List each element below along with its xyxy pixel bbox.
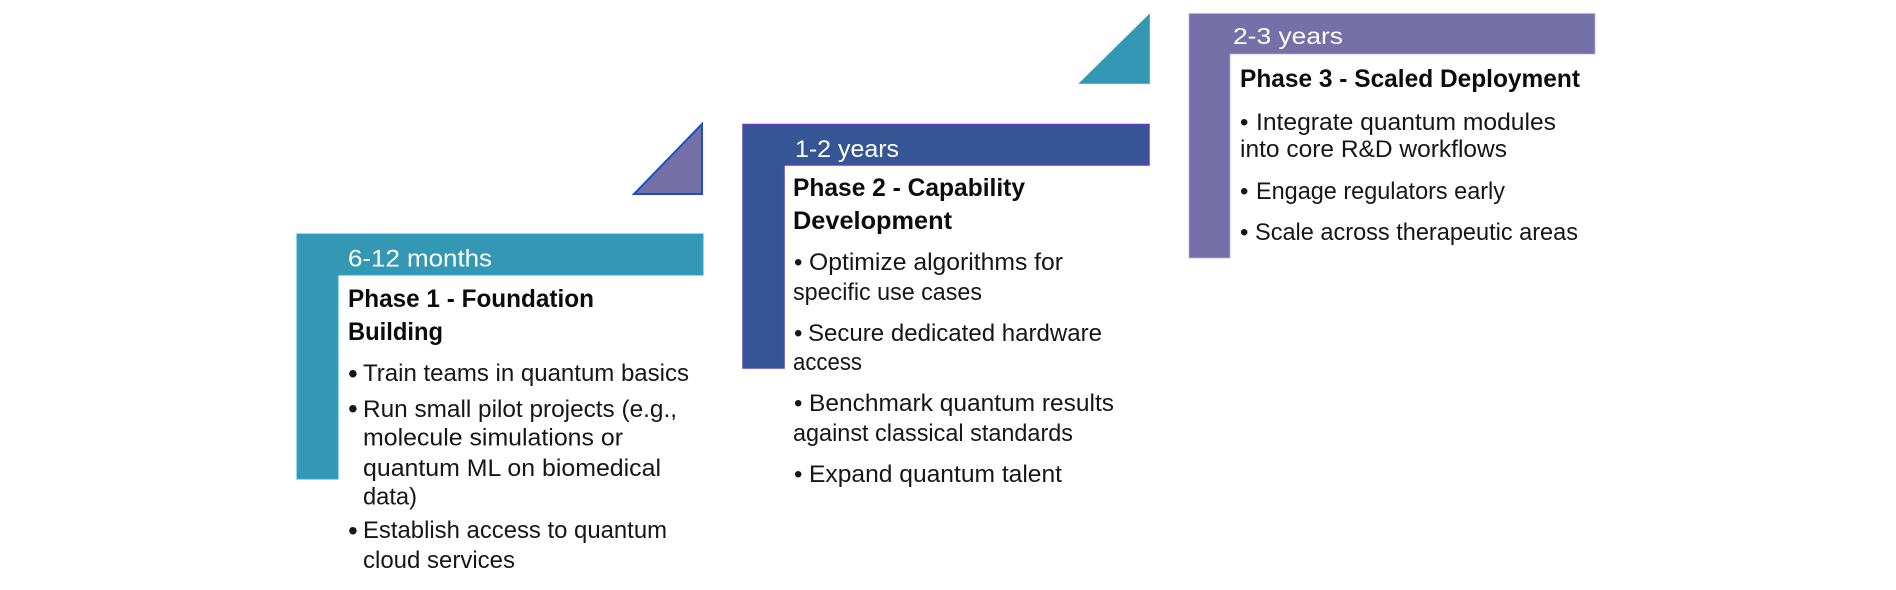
bullet list: phase 2: access	[793, 349, 862, 376]
bullet list: phase 2	[793, 249, 1114, 488]
panel: phase 3	[1189, 14, 1595, 258]
duration: 1-2 years: 1-2 years	[795, 136, 899, 163]
heading: phase 1: Phase 1 - Foundation	[348, 285, 594, 313]
heading: phase 1	[348, 285, 594, 346]
bullet list: phase 2: •	[794, 390, 802, 417]
bullet list: phase 2: specific use cases	[793, 279, 982, 306]
heading: phase 2: Phase 2 - Capability	[793, 174, 1025, 202]
bullet list: phase 1: Establish access to quantum	[363, 517, 667, 544]
bullet list: phase 3: into core R&D workflows	[1240, 136, 1507, 163]
bullet list: phase 3: Integrate quantum modules	[1256, 109, 1556, 136]
bullet list: phase 3	[1240, 109, 1578, 246]
bullet list: phase 1: quantum ML on biomedical	[363, 455, 661, 482]
bullet list: phase 2: Secure dedicated hardware	[808, 320, 1102, 347]
bullet list: phase 1: cloud services	[363, 547, 515, 574]
bullet list: phase 3: Engage regulators early	[1256, 178, 1505, 205]
bullet list: phase 1: Run small pilot projects (e.g.,	[363, 396, 677, 423]
bullet list: phase 2: Expand quantum talent	[809, 461, 1062, 488]
duration: 2-3 years: 2-3 years	[1233, 23, 1343, 49]
duration: 6-12 months: 6-12 months	[348, 246, 492, 272]
bullet list: phase 2: •	[794, 461, 802, 488]
heading: phase 3: Phase 3 - Scaled Deployment	[1240, 65, 1581, 93]
heading: phase 2: Development	[793, 207, 953, 235]
bullet list: phase 1: data)	[363, 484, 417, 510]
bullet list: phase 2: •	[794, 249, 802, 276]
bullet list: phase 2: •	[794, 320, 802, 347]
bullet list: phase 1	[348, 358, 689, 574]
bullet list: phase 2: Benchmark quantum results	[809, 390, 1114, 417]
heading: phase 1: Building	[348, 318, 443, 346]
bullet list: phase 1: •	[348, 515, 358, 546]
bullet list: phase 3: •	[1240, 178, 1248, 205]
panel: phase 2	[743, 124, 1149, 488]
L-shaped banner: phase 3	[1189, 14, 1595, 258]
panel: phase 1	[297, 234, 703, 574]
heading: phase 2	[793, 174, 1025, 235]
bullet list: phase 3: •	[1240, 219, 1248, 246]
bullet list: phase 1: •	[348, 358, 358, 389]
bullet list: phase 2: Optimize algorithms for	[809, 249, 1063, 276]
L-shaped banner: phase 2	[743, 124, 1149, 368]
bullet list: phase 3: Scale across therapeutic areas	[1255, 219, 1578, 246]
L-shaped banner: phase 1	[297, 234, 703, 479]
bullet list: phase 1: molecule simulations or	[363, 424, 623, 452]
bullet list: phase 3: •	[1240, 109, 1248, 136]
arrow triangle: phase 2 to 3	[1078, 13, 1150, 84]
bullet list: phase 2: against classical standards	[793, 420, 1073, 447]
arrow triangle: phase 1 to 2	[634, 124, 702, 194]
bullet list: phase 1: •	[348, 393, 358, 424]
bullet list: phase 1: Train teams in quantum basics	[363, 360, 689, 387]
